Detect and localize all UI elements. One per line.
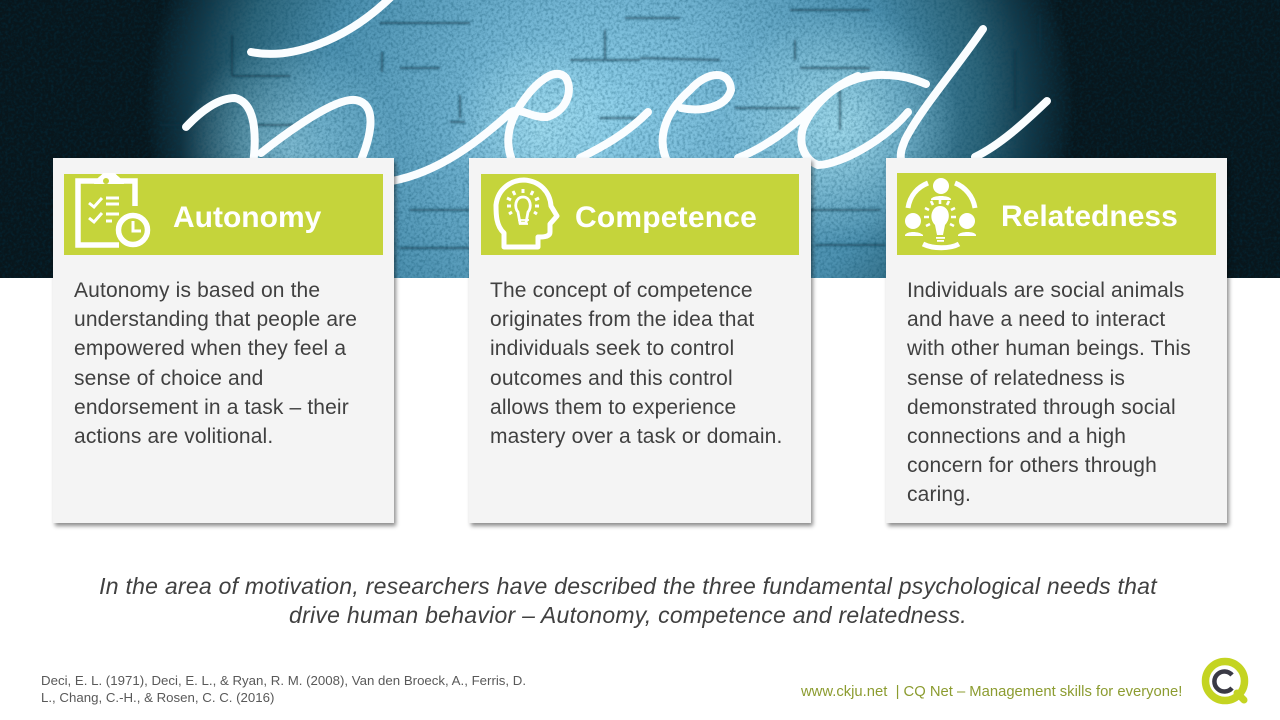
- text: relatedness description: connections and a high: [907, 425, 1126, 448]
- text: competence description: allows them to experience: [490, 396, 736, 419]
- heading: Competence: Competence: [575, 201, 757, 234]
- text: relatedness description: Individuals are social animals: [907, 279, 1184, 302]
- text: competence description: individuals seek to control: [490, 337, 734, 360]
- text: autonomy description: sense of choice and: [74, 367, 263, 390]
- text: competence description: outcomes and this control: [490, 367, 733, 390]
- panel: relatedness: [886, 158, 1227, 523]
- icon: clipboard with clock: [75, 173, 150, 248]
- heading: Autonomy: Autonomy: [173, 201, 321, 234]
- summary statement: [99, 573, 1158, 628]
- text: autonomy description: Autonomy is based on the: [74, 279, 320, 302]
- text: autonomy description: understanding that people are: [74, 308, 357, 331]
- text: relatedness description: and have a need to interact: [907, 308, 1165, 331]
- heading: Relatedness: Relatedness: [1001, 200, 1178, 233]
- references: Deci, E. L. (1971), Deci, E. L., & Ryan, R. M. (2008), Van den Broeck, A., Ferris, D.: [41, 673, 526, 688]
- neon tube lettering: [186, 0, 1047, 181]
- text: competence description: originates from the idea that: [490, 308, 754, 331]
- text: relatedness description: caring.: [907, 483, 971, 506]
- text: competence description: The concept of competence: [490, 279, 753, 302]
- background photo: neon "need" sign on brick wall: [0, 0, 1280, 278]
- panel: competence: [469, 158, 811, 523]
- text: relatedness description: [907, 279, 1191, 506]
- icon: people around light bulb: [905, 178, 978, 250]
- text: autonomy description: empowered when they feel a: [74, 337, 346, 360]
- text: relatedness description: demonstrated through social: [907, 396, 1176, 419]
- text: competence description: [490, 279, 782, 448]
- text: autonomy description: actions are volitional.: [74, 425, 273, 448]
- summary statement: In the area of motivation, researchers have described the three fundamental psychological needs that: [99, 573, 1157, 599]
- text: relatedness description: with other human beings. This: [907, 337, 1191, 360]
- references: L., Chang, C.-H., & Rosen, C. C. (2016): [41, 690, 274, 705]
- heading bar: relatedness: [897, 173, 1216, 255]
- footer credit: www.ckju.net | CQ Net – Management skills for everyone!: [801, 684, 1182, 700]
- text: relatedness description: sense of relatedness is: [907, 367, 1125, 390]
- text: autonomy description: endorsement in a task – their: [74, 396, 349, 419]
- text: relatedness description: concern for others through: [907, 454, 1157, 477]
- icon: head with light bulb: [494, 178, 560, 250]
- panel: autonomy: [53, 158, 394, 523]
- references: [41, 673, 526, 705]
- summary statement: drive human behavior – Autonomy, competence and relatedness.: [289, 602, 967, 628]
- heading bar: competence: [481, 174, 799, 255]
- logo: CQ: [1202, 658, 1248, 704]
- heading bar: autonomy: [64, 174, 383, 255]
- text: competence description: mastery over a task or domain.: [490, 425, 782, 448]
- text: autonomy description: [74, 279, 357, 448]
